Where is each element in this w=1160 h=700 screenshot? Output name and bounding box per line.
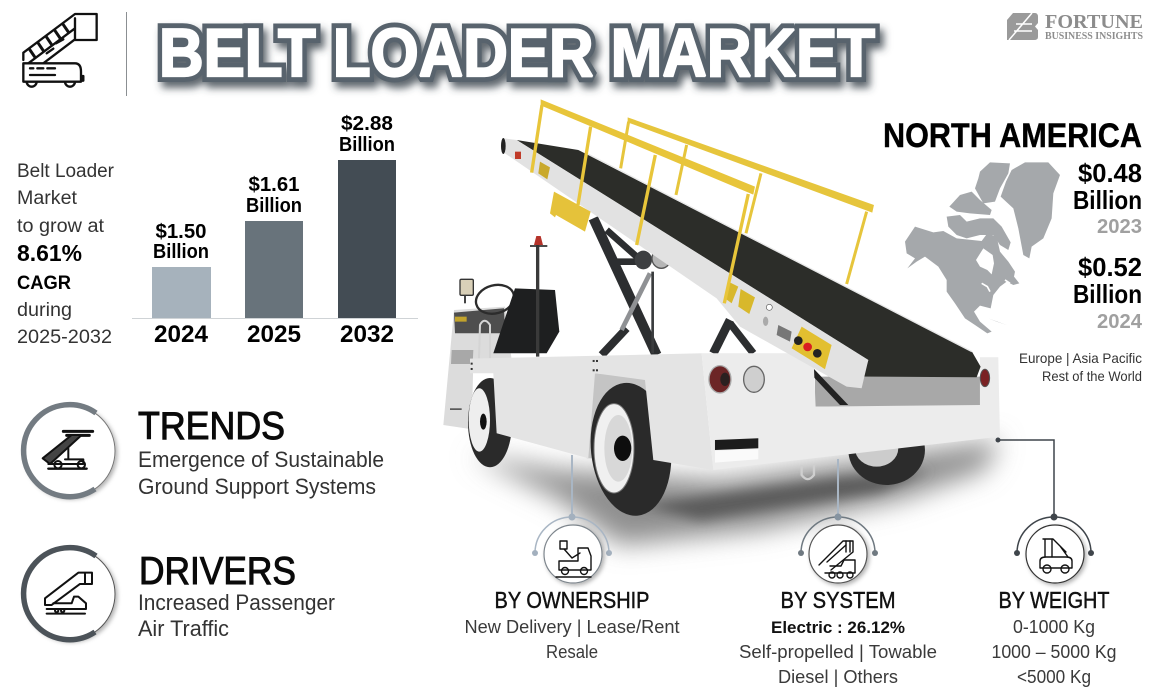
text: drivers description: Air Traffic — [138, 616, 229, 641]
bar: 2032: 2032 — [340, 321, 394, 348]
text block: CAGR statement: Market — [17, 188, 78, 209]
segment: by system — [739, 459, 937, 687]
bar: 2025: Billion — [246, 195, 302, 217]
near front wheel — [584, 379, 678, 520]
text: system options: Diesel | Others — [778, 667, 898, 687]
scissor lift — [593, 218, 753, 355]
panel: drivers — [23, 548, 335, 641]
text: drivers description: Increased Passenger — [138, 590, 335, 615]
tail lights — [709, 366, 990, 393]
wheel arches and rear cargo bay — [587, 368, 983, 460]
bar: 2024: Billion — [153, 241, 209, 263]
text: system options: Self-propelled | Towable — [739, 642, 937, 662]
text: trends description: Ground Support Systems — [138, 474, 376, 499]
stat: 2024 value: $0.52 — [1078, 252, 1142, 282]
segment: by ownership — [464, 455, 680, 662]
text: trends description: Emergence of Sustainable — [138, 447, 384, 472]
rear left wheel — [468, 378, 512, 467]
logo: Fortune Business Insights: FORTUNE — [1045, 11, 1143, 33]
bar: 2025: $1.61 — [248, 174, 300, 196]
conveyor side frame — [501, 138, 972, 388]
stat: 2024 value: Billion — [1073, 279, 1142, 309]
map: North America — [905, 162, 1060, 333]
bar: 2025 — [245, 174, 303, 348]
bar: 2024: $1.50 — [156, 221, 206, 243]
tractor cab — [443, 236, 559, 429]
text: trends description — [138, 447, 384, 499]
text: weight options — [992, 617, 1116, 687]
stat: 2023 value: 2023 — [1097, 216, 1142, 238]
icon: system badge — [798, 459, 878, 583]
text: other regions: Rest of the World — [1042, 368, 1142, 384]
heading: drivers: DRIVERS — [139, 550, 296, 593]
stat: 2024 value: 2024 — [1097, 311, 1143, 333]
text block: CAGR statement: Belt Loader — [17, 161, 115, 182]
text: ownership options: Resale — [546, 642, 598, 662]
heading: by ownership: BY OWNERSHIP — [494, 587, 650, 613]
icon: ownership badge — [532, 455, 612, 583]
text block: CAGR statement: to grow at — [17, 216, 105, 237]
text block: CAGR statement — [17, 161, 115, 348]
text: other regions: Europe | Asia Pacific — [1019, 350, 1142, 366]
text: ownership options: New Delivery | Lease/Rent — [464, 617, 680, 637]
icon: drivers ring and loader — [23, 548, 115, 640]
segment: by weight — [992, 438, 1116, 687]
belt loader vehicle — [443, 99, 1000, 520]
conveyor belt — [517, 140, 981, 377]
title: BELT LOADER MARKET — [159, 15, 875, 91]
stat: 2023 value: Billion — [1073, 185, 1142, 215]
icon: trends ring and loader — [23, 405, 115, 497]
bar: 2032: Billion — [339, 134, 395, 156]
text block: CAGR statement: during — [17, 300, 72, 321]
heading: by weight: BY WEIGHT — [998, 587, 1110, 613]
title: BELT LOADER MARKET — [159, 15, 875, 91]
panel: trends — [23, 405, 384, 499]
bar: 2024 — [152, 221, 211, 348]
bar chart: market size — [132, 113, 418, 348]
stat: 2024 value — [1073, 252, 1143, 333]
chassis body — [470, 353, 1000, 479]
text: other regions — [1019, 350, 1142, 384]
text: system options — [739, 618, 937, 687]
text: weight options: 0-1000 Kg — [1013, 617, 1095, 637]
icon: weight badge — [996, 438, 1094, 583]
icon: belt loader header icon — [23, 14, 97, 87]
far yellow rail — [621, 117, 874, 284]
bar: 2024: 2024 — [154, 321, 209, 348]
text: drivers description — [138, 590, 335, 641]
control box — [792, 327, 832, 369]
stat: 2023 value — [1073, 158, 1142, 238]
near yellow rail — [532, 99, 755, 303]
stat: 2023 value: $0.48 — [1078, 158, 1142, 188]
ground shadow — [470, 440, 1000, 545]
text block: CAGR statement: 2025-2032 — [17, 327, 112, 348]
bar: 2032: $2.88 — [341, 113, 393, 135]
text: ownership options — [464, 617, 680, 662]
text: weight options: <5000 Kg — [1017, 667, 1091, 687]
far rear wheel — [848, 415, 925, 485]
heading: trends: TRENDS — [138, 405, 285, 448]
logo: Fortune Business Insights — [1007, 11, 1143, 42]
text block: CAGR statement: 8.61% — [17, 240, 82, 266]
text: system options: Electric : 26.12% — [771, 618, 905, 637]
logo: Fortune Business Insights: BUSINESS INSIGHTS — [1045, 31, 1143, 42]
text: weight options: 1000 – 5000 Kg — [992, 642, 1116, 662]
text block: CAGR statement: CAGR — [17, 273, 71, 294]
bar: 2025: 2025 — [247, 321, 301, 348]
heading: by system: BY SYSTEM — [780, 587, 896, 613]
bar: 2032 — [338, 113, 396, 348]
